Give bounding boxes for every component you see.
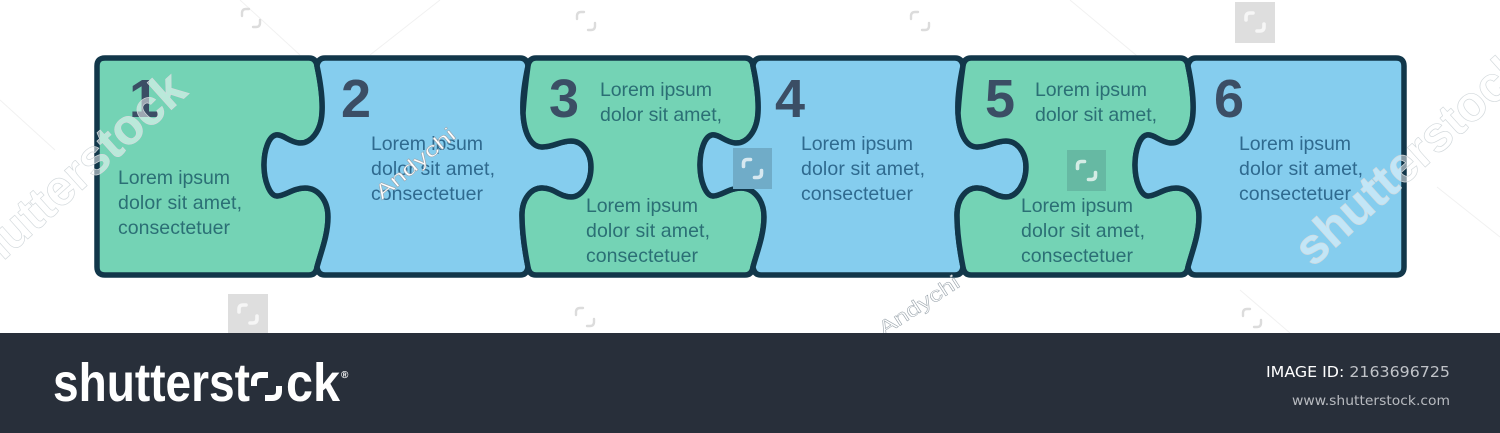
number 4: 4 — [775, 69, 805, 129]
icon: watermark mark top 1 — [242, 9, 260, 27]
text block: piece 3 lower: consectetuer — [586, 245, 698, 267]
text block: piece 3 lower — [586, 195, 710, 267]
text block: piece 4: consectetuer — [801, 183, 914, 205]
footer logo: ck — [286, 353, 341, 413]
icon: grey box mark bottom left — [228, 294, 268, 334]
footer bar — [0, 333, 1500, 433]
panel: piece 6 — [1135, 58, 1404, 275]
watermark: author centre: Andychi — [371, 124, 460, 204]
text block: piece 3 upper: Lorem ipsum — [600, 79, 712, 101]
icon: blue box mark — [733, 148, 772, 189]
text block: piece 5 upper: Lorem ipsum — [1035, 79, 1147, 101]
number 1: 1 — [129, 69, 159, 129]
text block: piece 6: consectetuer — [1239, 183, 1352, 205]
icon: watermark mark bottom 3 — [1243, 309, 1261, 327]
text block: piece 4 — [801, 133, 925, 205]
panel: piece 4 — [700, 58, 1026, 275]
icon: grey box mark top right — [1235, 2, 1275, 43]
text block: piece 4: dolor sit amet, — [801, 158, 925, 180]
panel: piece 2 — [264, 58, 591, 275]
text block: piece 3 upper: dolor sit amet, — [600, 104, 722, 126]
panel: piece 1 — [97, 58, 328, 275]
text block: piece 5 upper — [1035, 79, 1157, 126]
icon: green box mark — [1067, 150, 1106, 191]
number 2: 2 — [341, 69, 371, 129]
number 5: 5 — [985, 69, 1015, 129]
text block: piece 6: Lorem ipsum — [1239, 133, 1351, 155]
text block: piece 1: consectetuer — [118, 217, 230, 239]
website url: www.shutterstock.com — [1292, 393, 1450, 409]
text block: piece 3 lower: Lorem ipsum — [586, 195, 698, 217]
puzzle strip — [97, 58, 1404, 275]
text block: piece 6: dolor sit amet, — [1239, 158, 1363, 180]
text block: piece 2 — [371, 133, 495, 205]
footer logo: shutterst — [53, 353, 250, 413]
text block: piece 2: Lorem ipsum — [371, 133, 483, 155]
panel: piece 5 — [957, 58, 1199, 275]
footer logo: ® — [341, 370, 349, 381]
text block: piece 1: dolor sit amet, — [118, 192, 242, 214]
number 6: 6 — [1214, 69, 1244, 129]
text block: piece 3 upper — [600, 79, 722, 126]
text block: piece 3 lower: dolor sit amet, — [586, 220, 710, 242]
panel: piece 3 — [522, 58, 764, 275]
text block: piece 5 lower — [1021, 195, 1145, 267]
icon: watermark mark top 3 — [911, 12, 929, 30]
text block: piece 6 — [1239, 133, 1363, 205]
text block: piece 5 lower: Lorem ipsum — [1021, 195, 1133, 217]
text block: piece 5 lower: consectetuer — [1021, 245, 1134, 267]
image id: IMAGE ID: 2163696725 — [1266, 363, 1450, 381]
watermark: author bottom: Andychi — [875, 272, 964, 340]
text block: piece 1 — [118, 167, 242, 239]
text block: piece 2: consectetuer — [371, 183, 484, 205]
text block: piece 5 upper: dolor sit amet, — [1035, 104, 1157, 126]
icon: watermark mark top 2 — [577, 12, 595, 30]
text block: piece 1: Lorem ipsum — [118, 167, 230, 189]
text block: piece 4: Lorem ipsum — [801, 133, 913, 155]
text block: piece 5 lower: dolor sit amet, — [1021, 220, 1145, 242]
icon: watermark mark bottom 2 — [576, 308, 594, 326]
number 3: 3 — [549, 69, 579, 129]
text block: piece 2: dolor sit amet, — [371, 158, 495, 180]
